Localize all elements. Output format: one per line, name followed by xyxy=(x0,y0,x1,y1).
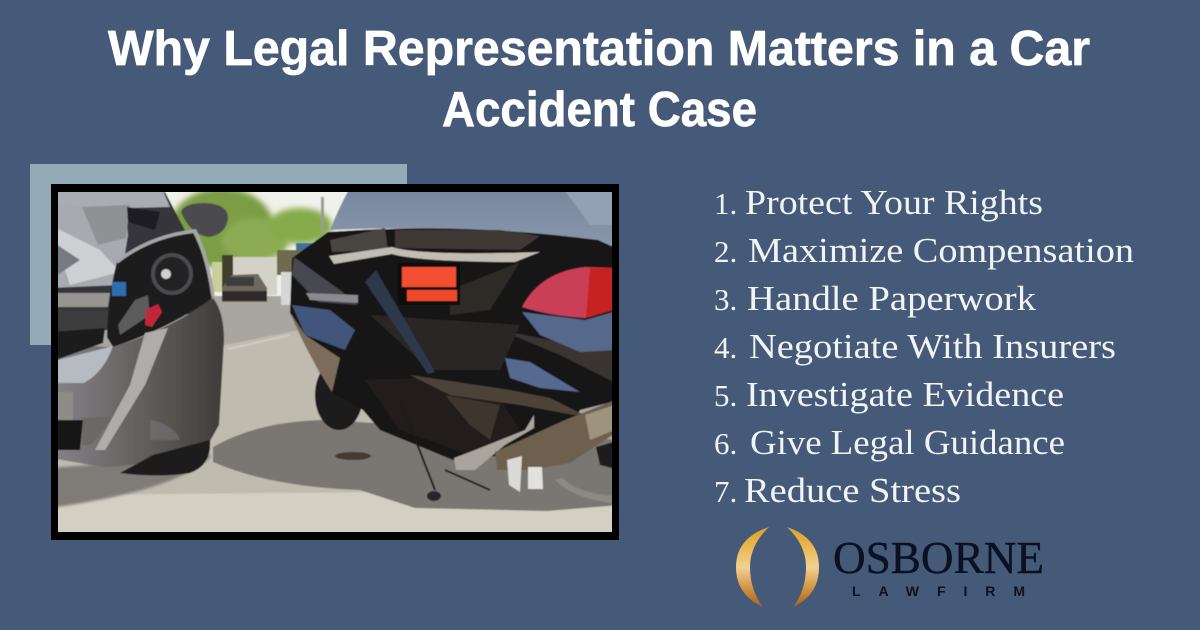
wordmark: OSBORNE xyxy=(833,532,1044,583)
numbered list: 5. xyxy=(714,378,737,413)
red plate xyxy=(398,263,460,305)
tail light xyxy=(522,267,620,318)
pavement xyxy=(58,330,374,494)
numbered list xyxy=(714,183,1134,510)
broken headlight xyxy=(107,233,212,347)
ground shadow xyxy=(213,420,620,511)
front car: damaged grey sedan xyxy=(50,184,228,476)
numbered list: 7. xyxy=(714,474,737,509)
grille xyxy=(58,328,106,360)
road xyxy=(94,296,612,440)
side mirror xyxy=(181,203,228,237)
numbered list: Give Legal Guidance xyxy=(750,423,1065,462)
photo: two damaged cars after collision xyxy=(50,184,620,540)
rear wheel xyxy=(314,372,362,430)
icon: gold crescents xyxy=(736,527,819,607)
chrome strip xyxy=(329,247,540,264)
numbered list: 4. xyxy=(714,330,737,365)
front wheel xyxy=(120,440,210,476)
title: Accident Case xyxy=(442,83,757,137)
numbered list: 3. xyxy=(714,282,737,317)
numbered list: Reduce Stress xyxy=(744,471,961,510)
title: Why Legal Representation Matters in a Car xyxy=(108,22,1090,76)
numbered list: 1. xyxy=(714,186,737,221)
distant car xyxy=(222,272,303,305)
title xyxy=(108,22,1090,137)
reflection panels xyxy=(330,228,388,252)
trees and street background xyxy=(170,188,332,295)
numbered list: Maximize Compensation xyxy=(748,231,1134,270)
numbered list: Negotiate With Insurers xyxy=(749,327,1116,366)
bumper xyxy=(50,298,224,467)
logo: Osborne Law Firm xyxy=(736,527,1044,607)
numbered list: Investigate Evidence xyxy=(746,375,1064,414)
black body xyxy=(290,228,620,460)
windshield and hood xyxy=(58,192,212,315)
exposed metal xyxy=(365,270,435,374)
numbered list: Protect Your Rights xyxy=(745,183,1043,222)
photo frame xyxy=(51,184,619,540)
trunk lid xyxy=(330,192,612,248)
accent panel behind photo xyxy=(30,164,407,345)
blue body panels xyxy=(522,310,620,352)
sky xyxy=(162,192,596,297)
crumpled left panel xyxy=(292,257,358,305)
exhaust pipes xyxy=(507,456,522,492)
numbered list: 2. xyxy=(714,234,737,269)
tagline: LAWFIRM xyxy=(852,583,1025,599)
rear car: damaged black sedan xyxy=(290,184,620,504)
numbered list: Handle Paperwork xyxy=(747,279,1037,318)
hanging bumper debris xyxy=(454,415,534,470)
under-body xyxy=(365,378,520,455)
numbered list: 6. xyxy=(714,426,737,461)
